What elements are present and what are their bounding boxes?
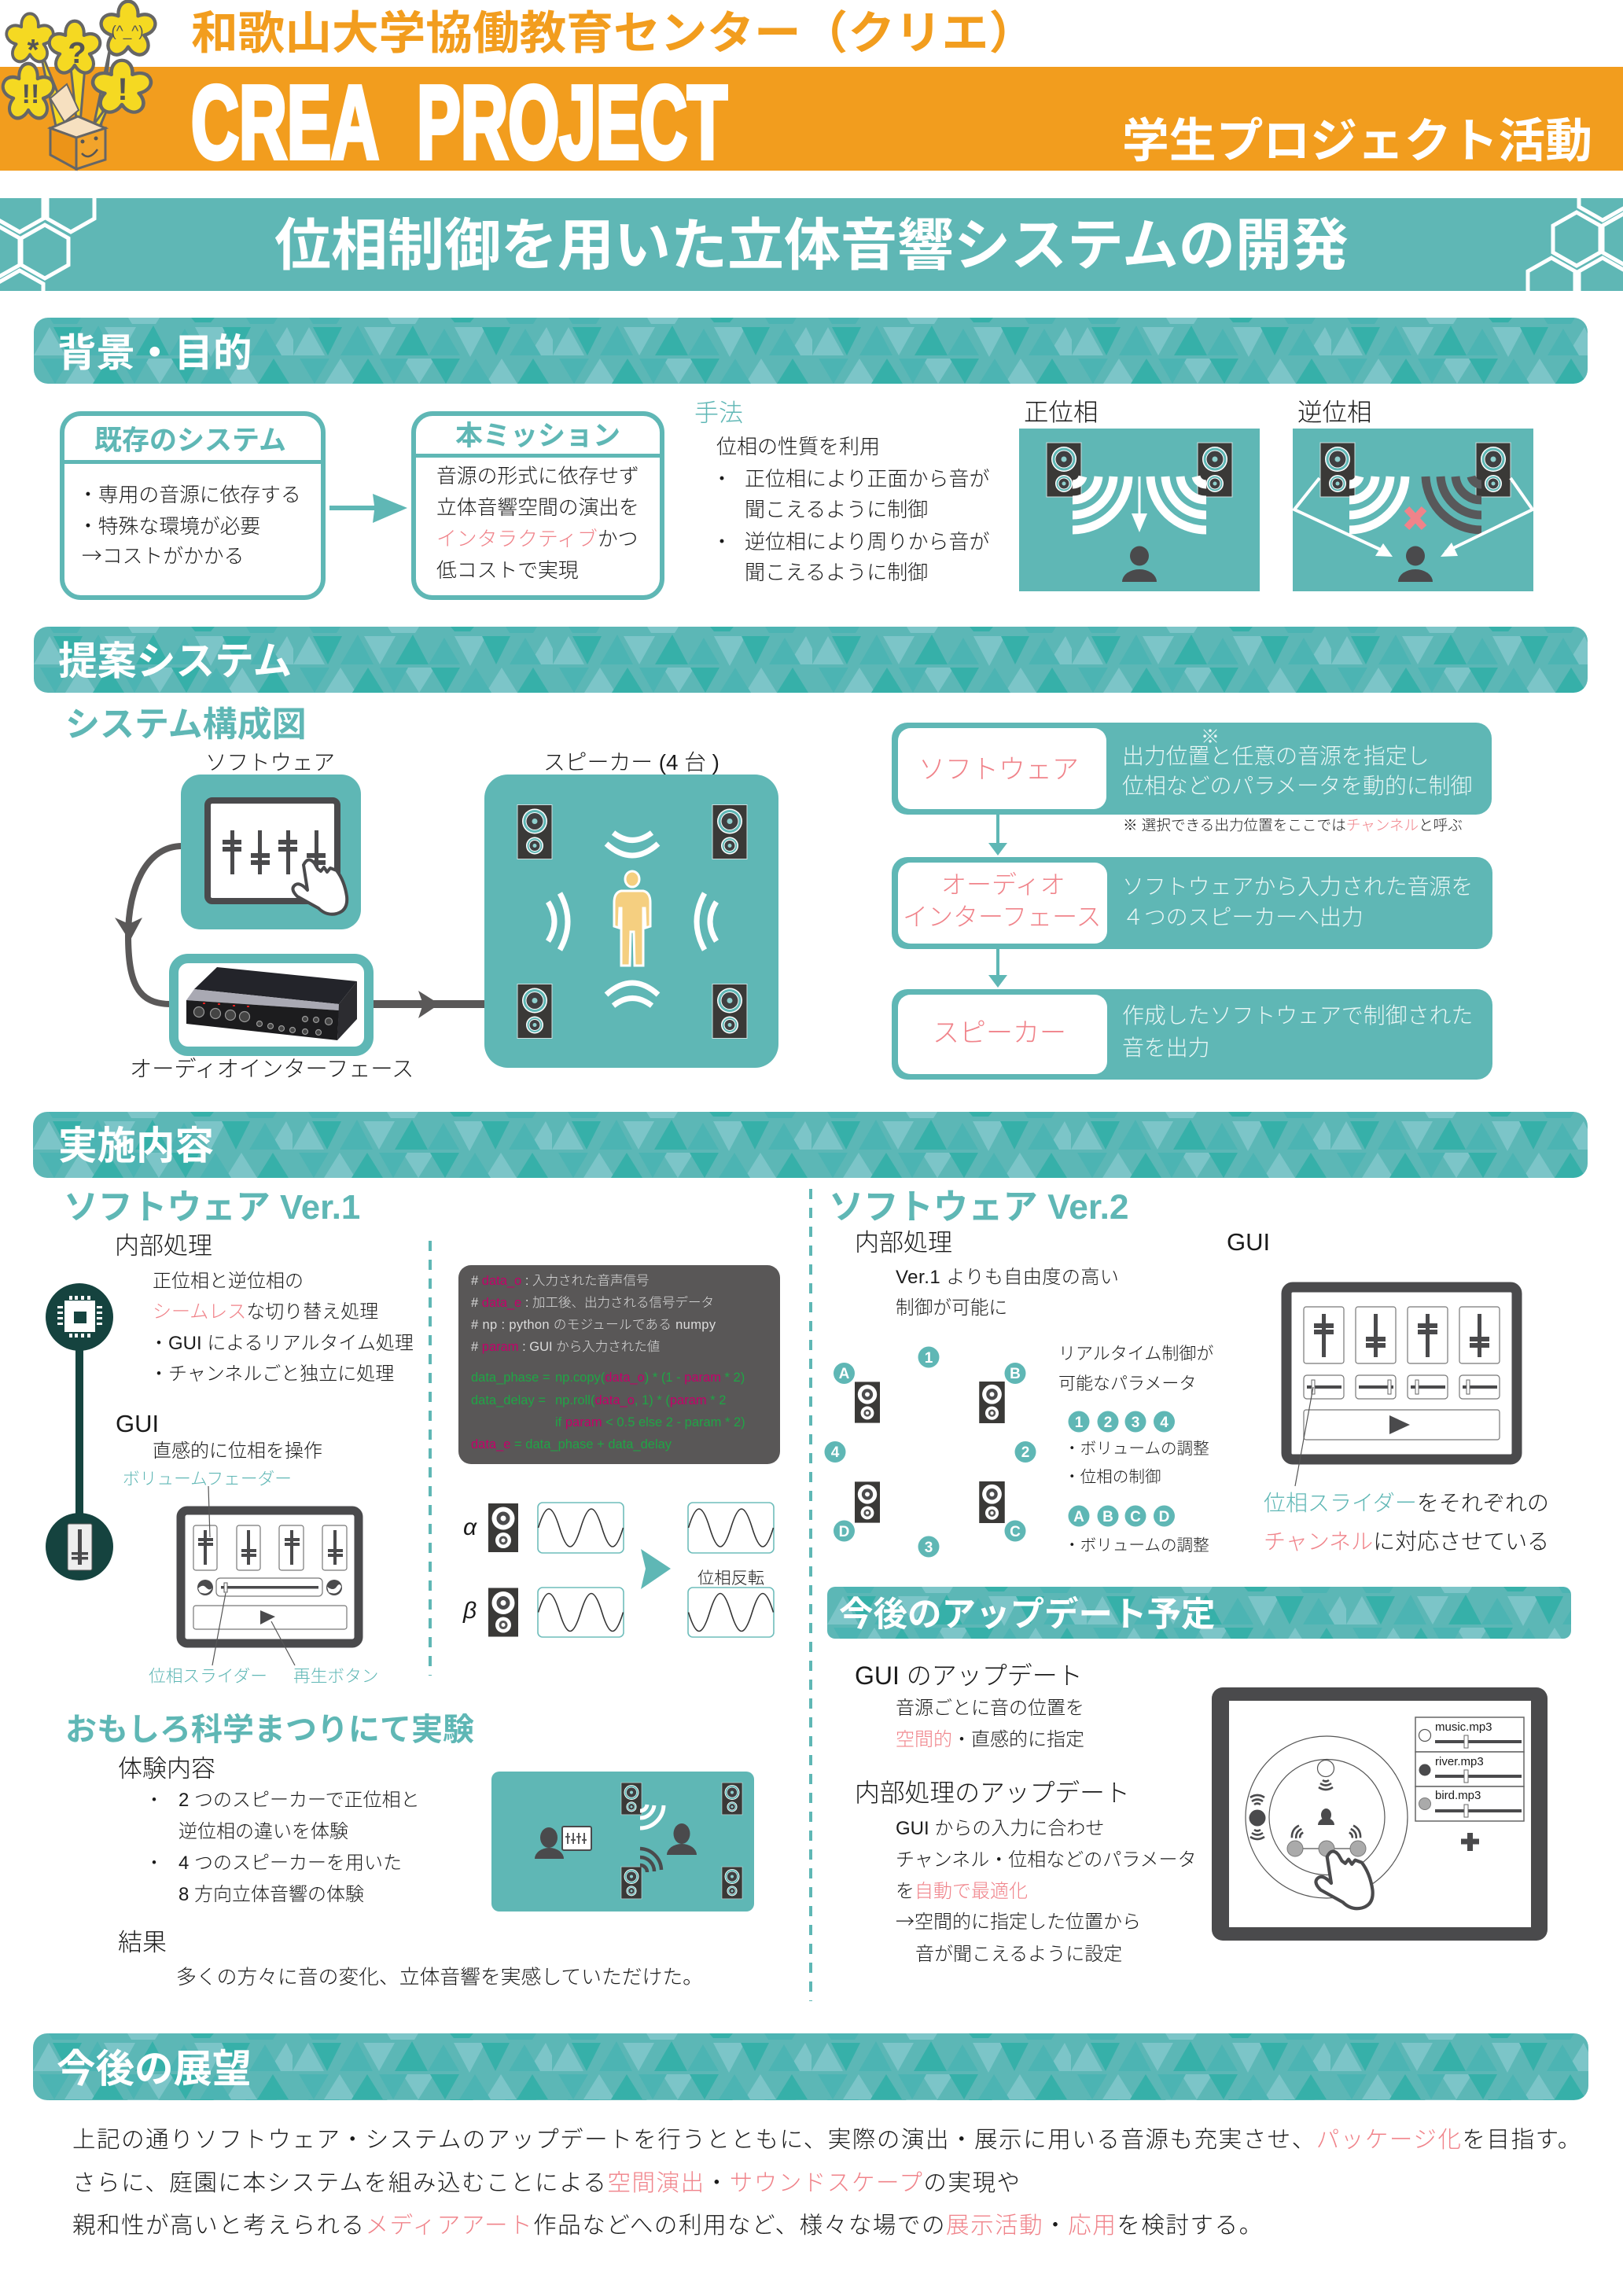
- text block: internal processing ver.1: ・GUI によるリアルタイム処理: [149, 1333, 414, 1354]
- icon: CREA box with speech stars: !: [117, 72, 128, 107]
- section bar: background and purpose: 背景・目的: [57, 332, 252, 375]
- diagram: phase inversion waves: [462, 1503, 774, 1637]
- panel: code listing: [458, 1265, 780, 1464]
- diagram: speaker and parameter layout: B: [1010, 1366, 1021, 1382]
- label: phase slider: 位相スライダー: [149, 1666, 267, 1686]
- callout: phase slider mapping: [1264, 1491, 1549, 1554]
- panel: code listing: data_delay =: [471, 1393, 546, 1407]
- flow box: audio interface: オーディオ: [941, 870, 1065, 899]
- flow box: software: ソフトウェア: [918, 755, 1079, 785]
- diagram: speaker and parameter layout: A: [839, 1366, 850, 1382]
- arrow: audio interface to speakers: [374, 991, 485, 1018]
- section bar: future updates: [827, 1587, 1571, 1639]
- text block: internal processing ver.2: 制御が可能に: [896, 1297, 1007, 1319]
- flow box: speakers: 音を出力: [1122, 1036, 1210, 1060]
- label: anti-phase: 逆位相: [1297, 398, 1372, 426]
- text block: outlook paragraph: 親和性が高いと考えられるメディアアート作品などへの利用など、様々な場での展示活動・応用を検討する。: [72, 2213, 1264, 2239]
- text block: processing update: [855, 1779, 1197, 1965]
- text block: internal processing ver.2: [855, 1229, 1119, 1319]
- panel: software tablet: [181, 775, 361, 929]
- label: in-phase: 正位相: [1024, 398, 1099, 426]
- title band: [0, 198, 1623, 291]
- panel: this mission: 立体音響空間の演出を: [436, 496, 639, 519]
- panel: this mission: インタラクティブかつ: [436, 528, 638, 550]
- text block: experience content: 8 方向立体音響の体験: [178, 1884, 364, 1905]
- diagram: future gui tablet: music.mp3: [1435, 1720, 1492, 1734]
- text block: realtime parameters: A: [1073, 1509, 1084, 1525]
- title band: right hexagon decoration: [1525, 198, 1623, 291]
- panel: audio interface photo: [174, 959, 369, 1051]
- timeline icons: chip and fader: [46, 1283, 113, 1580]
- text block: realtime parameters: 4: [1160, 1415, 1168, 1431]
- header: student project label: 学生プロジェクト活動: [1122, 115, 1592, 167]
- panel: existing system: →コストがかかる: [82, 540, 244, 569]
- text block: outlook paragraph: 上記の通りソフトウェア・システムのアップデートを行うとともに、実際の演出・展示に用いる音源も充実させ、パッケージ化を目指す。: [72, 2127, 1582, 2153]
- callout: phase slider mapping: チャンネルに対応させている: [1264, 1529, 1549, 1554]
- flow box: audio interface: [892, 857, 1492, 949]
- arrow: software to audio interface: [115, 846, 182, 1004]
- arrow: interface to speaker step: [988, 949, 1007, 988]
- text block: method: 位相の性質を利用: [716, 435, 880, 458]
- text block: method: 聞こえるように制御: [745, 498, 928, 521]
- diagram: phase inversion waves: β: [462, 1598, 477, 1624]
- panel: code listing: # np : python のモジュールである numpy: [471, 1318, 716, 1332]
- arrow: existing system to mission: [329, 494, 407, 523]
- callout: phase slider mapping: 位相スライダーをそれぞれの: [1264, 1491, 1549, 1515]
- header: orange band: [0, 67, 1623, 171]
- heading: software ver.1: ソフトウェア Ver.1: [64, 1188, 360, 1227]
- diagram: gui ver.1 tablet: [181, 1486, 359, 1665]
- diagram: speaker and parameter layout: 1: [925, 1350, 933, 1367]
- header: CREA PROJECT logotype: CREA: [191, 64, 379, 180]
- diagram: speaker and parameter layout: [824, 1346, 1036, 1557]
- text block: processing update: 音が聞こえるように設定: [915, 1944, 1122, 1965]
- heading: science festival: おもしろ科学まつりにて実験: [65, 1713, 474, 1747]
- text block: experience content: [118, 1755, 420, 1905]
- text block: realtime parameters: ・ボリュームの調整: [1064, 1440, 1209, 1458]
- text block: gui ver.1: 直感的に位相を操作: [153, 1441, 322, 1462]
- panel: code listing: np.copy(: [555, 1371, 605, 1385]
- header: organisation name: 和歌山大学協働教育センター（クリエ）: [191, 8, 1036, 59]
- text block: internal processing ver.1: 内部処理: [115, 1232, 212, 1260]
- flow box: speakers: スピーカー: [933, 1018, 1066, 1048]
- text block: method: [694, 399, 989, 584]
- flow box: audio interface: ４つのスピーカーへ出力: [1122, 905, 1364, 929]
- text block: method: 聞こえるように制御: [745, 561, 928, 584]
- text block: processing update: 内部処理のアップデート: [855, 1779, 1130, 1807]
- text block: realtime parameters: C: [1130, 1509, 1141, 1525]
- diagram: future gui tablet: bird.mp3: [1435, 1789, 1481, 1802]
- label: gui ver.2: GUI: [1227, 1228, 1270, 1256]
- panel: code listing: # param : GUI から入力された値: [471, 1339, 660, 1354]
- text block: processing update: を自動で最適化: [896, 1881, 1028, 1902]
- panel: this mission: 音源の形式に依存せず: [436, 465, 639, 488]
- text block: method: ・: [712, 530, 732, 554]
- diagram: speaker and parameter layout: D: [839, 1524, 849, 1540]
- diagram: in-phase: [1019, 429, 1260, 591]
- text block: processing update: チャンネル・位相などのパラメータ: [896, 1849, 1197, 1871]
- section bar: future outlook: [33, 2033, 1588, 2100]
- icon: CREA box with speech stars: ?: [68, 37, 86, 70]
- text block: gui ver.1: [116, 1410, 322, 1488]
- text block: realtime parameters: リアルタイム制御が: [1058, 1344, 1213, 1363]
- section bar: background and purpose: [34, 318, 1588, 384]
- arrow: software to interface step: [988, 815, 1007, 855]
- diagram: future gui tablet: [1212, 1687, 1548, 1941]
- panel: code listing: # data_o : 入力された音声信号: [471, 1273, 650, 1288]
- diagram: future gui tablet: river.mp3: [1435, 1755, 1484, 1768]
- diagram: experiment layout: [491, 1772, 754, 1911]
- panel: code listing: # data_e : 加工後、出力される信号データ: [471, 1295, 714, 1310]
- icon: CREA box with speech stars: (^_^): [111, 24, 144, 40]
- text block: method: ・: [712, 467, 732, 491]
- text block: realtime parameters: 1: [1075, 1415, 1084, 1431]
- text block: gui update: GUI のアップデート: [855, 1661, 1083, 1690]
- flow box: software: 出力位置と任意の音源を指定し: [1122, 744, 1429, 768]
- diagram: anti-phase: [1293, 429, 1533, 591]
- text block: method: 逆位相により周りから音が: [745, 530, 989, 554]
- panel: existing system: 既存のシステム: [94, 425, 286, 456]
- icon: CREA box with speech stars: !!: [22, 79, 39, 109]
- text block: experience content: 4 つのスピーカーを用いた: [178, 1853, 402, 1874]
- text block: outlook paragraph: さらに、庭園に本システムを組み込むことによる空間演出・サウンドスケープの実現や: [72, 2170, 1021, 2196]
- diagram: speaker and parameter layout: 4: [831, 1444, 840, 1461]
- text block: result: 多くの方々に音の変化、立体音響を実感していただけた。: [176, 1966, 703, 1989]
- diagram: speaker and parameter layout: C: [1010, 1524, 1021, 1540]
- section bar: proposed system: [34, 627, 1588, 693]
- text block: realtime parameters: D: [1159, 1509, 1169, 1525]
- text block: result: [118, 1929, 703, 1989]
- panel: this mission: 低コストで実現: [436, 559, 579, 582]
- flow box: software: 位相などのパラメータを動的に制御: [1122, 774, 1472, 798]
- text block: experience content: ・: [145, 1853, 164, 1874]
- panel: existing system: ・特殊な環境が必要: [78, 515, 260, 538]
- heading: system diagram: システム構成図: [65, 705, 307, 744]
- label: software: ソフトウェア: [205, 750, 335, 775]
- title band: left hexagon decoration: [0, 198, 96, 291]
- header: CREA PROJECT logotype: [191, 64, 727, 180]
- flow box: audio interface: ソフトウェアから入力された音源を: [1122, 874, 1473, 899]
- text block: processing update: GUI からの入力に合わせ: [896, 1818, 1104, 1839]
- text block: gui update: [855, 1661, 1084, 1750]
- panel: existing system: ・専用の音源に依存する: [78, 484, 301, 506]
- text block: internal processing ver.2: Ver.1 よりも自由度の高い: [896, 1267, 1119, 1288]
- header: CREA PROJECT logotype: PROJECT: [417, 64, 727, 180]
- panel: code listing: data_o) * (1 - param * 2): [605, 1371, 745, 1385]
- section bar: future updates: 今後のアップデート予定: [839, 1595, 1216, 1634]
- section bar: proposed system: 提案システム: [58, 639, 292, 683]
- flow box: speakers: 作成したソフトウェアで制御された: [1122, 1003, 1473, 1028]
- text block: internal processing ver.2: 内部処理: [855, 1229, 952, 1257]
- flow box: audio interface: インターフェース: [903, 903, 1101, 931]
- diagram: phase inversion waves: 位相反転: [697, 1569, 764, 1588]
- diagram: phase inversion waves: α: [463, 1514, 477, 1540]
- section bar: future outlook: 今後の展望: [57, 2048, 252, 2091]
- text block: experience content: 体験内容: [118, 1755, 215, 1783]
- text block: internal processing ver.1: [115, 1232, 414, 1385]
- main title: 位相制御を用いた立体音響システムの開発: [274, 215, 1349, 278]
- flow box: software: [892, 723, 1492, 815]
- icon: CREA box with speech stars: [3, 2, 155, 169]
- icon: CREA box with speech stars: *: [28, 34, 39, 67]
- label: audio interface: オーディオインターフェース: [130, 1056, 414, 1081]
- label: play button: 再生ボタン: [293, 1666, 378, 1686]
- section bar: implementation: [33, 1112, 1588, 1178]
- text block: internal processing ver.1: シームレスな切り替え処理: [153, 1301, 378, 1323]
- text block: internal processing ver.1: ・チャンネルごと独立に処理: [149, 1363, 394, 1385]
- panel: this mission: [414, 414, 662, 598]
- panel: this mission: 本ミッション: [455, 421, 620, 451]
- text block: gui ver.1: GUI: [116, 1410, 159, 1437]
- text block: realtime parameters: ・位相の制御: [1064, 1468, 1161, 1486]
- panel: four speakers with listener: [484, 775, 778, 1068]
- section bar: implementation: 実施内容: [58, 1124, 214, 1168]
- diagram: speaker and parameter layout: 3: [925, 1540, 933, 1556]
- text block: realtime parameters: [1058, 1344, 1213, 1555]
- panel: existing system: [62, 414, 323, 598]
- text block: realtime parameters: 可能なパラメータ: [1058, 1374, 1196, 1393]
- text block: method: 手法: [694, 399, 743, 427]
- panel: code listing: data_phase =: [471, 1371, 550, 1385]
- text block: processing update: →空間的に指定した位置から: [896, 1906, 1141, 1934]
- text block: outlook paragraph: [72, 2127, 1582, 2239]
- label: speakers: スピーカー (4 台 ): [543, 750, 719, 775]
- flow box: speakers: [892, 989, 1492, 1080]
- text block: internal processing ver.1: 正位相と逆位相の: [153, 1271, 304, 1292]
- text block: gui update: 音源ごとに音の位置を: [896, 1698, 1084, 1719]
- text block: experience content: 2 つのスピーカーで正位相と: [178, 1790, 420, 1811]
- text block: gui update: 空間的・直感的に指定: [896, 1729, 1084, 1750]
- text block: method: 正位相により正面から音が: [745, 467, 989, 491]
- text block: realtime parameters: 3: [1132, 1415, 1139, 1431]
- footnote: ※ 選択できる出力位置をここではチャンネルと呼ぶ: [1123, 817, 1463, 833]
- text block: experience content: 逆位相の違いを体験: [178, 1821, 348, 1842]
- text block: realtime parameters: ・ボリュームの調整: [1064, 1536, 1209, 1555]
- heading: software ver.2: ソフトウェア Ver.2: [829, 1188, 1129, 1227]
- text block: realtime parameters: B: [1102, 1509, 1113, 1525]
- text block: result: 結果: [118, 1929, 167, 1956]
- diagram: speaker and parameter layout: 2: [1021, 1444, 1029, 1461]
- flow box: software: ※: [1201, 727, 1220, 748]
- panel: code listing: if param < 0.5 else 2 - param * 2): [555, 1415, 745, 1429]
- text block: experience content: ・: [145, 1790, 164, 1811]
- text block: realtime parameters: 2: [1104, 1415, 1112, 1431]
- panel: code listing: data_o, 1) * (param * 2: [594, 1393, 726, 1407]
- panel: code listing: np.roll(: [555, 1393, 595, 1407]
- panel: code listing: data_e = data_phase + data_delay: [471, 1437, 672, 1452]
- text block: gui ver.1: ボリュームフェーダー: [123, 1469, 292, 1488]
- diagram: gui ver.2 tablet: [1286, 1287, 1517, 1486]
